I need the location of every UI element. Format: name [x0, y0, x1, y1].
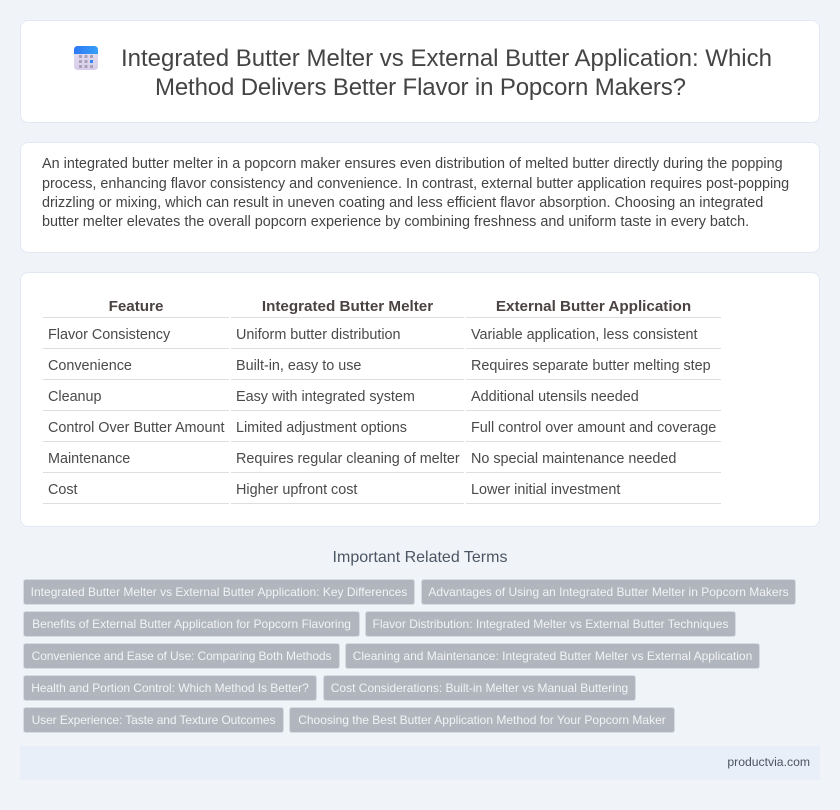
row: control over butter amount: Full control over amount and coverage [471, 420, 716, 436]
row: cost: Cost [48, 482, 78, 498]
tag [23, 675, 317, 701]
panel: introduction [20, 142, 820, 253]
tag [365, 611, 736, 637]
table header [109, 298, 691, 315]
row: cost: Lower initial investment [471, 482, 620, 498]
tag: Cleaning and Maintenance: Integrated Butter Melter vs External Application [353, 649, 752, 663]
row: maintenance [43, 451, 721, 473]
row: cleanup: Easy with integrated system [236, 389, 415, 405]
heading: important related terms: Important Related Terms [333, 549, 507, 566]
tag: Choosing the Best Butter Application Method for Your Popcorn Maker [298, 713, 666, 727]
tag: Benefits of External Butter Application for Popcorn Flavoring [32, 617, 351, 631]
text block: introduction paragraph: process, enhancing flavor consistency and convenience. In contrast, external butter application requires post-popping [42, 176, 789, 192]
text block: introduction paragraph [42, 156, 789, 230]
text block: introduction paragraph: An integrated butter melter in a popcorn maker ensures even distribution of melted butter directly during the popping [42, 156, 783, 172]
panel: title card [20, 20, 820, 123]
footer bar [20, 746, 820, 780]
tag [421, 579, 796, 605]
tag: Cost Considerations: Built-in Melter vs Manual Buttering [331, 681, 628, 695]
tag [23, 579, 415, 605]
row: convenience: Requires separate butter melting step [471, 358, 711, 374]
tag [289, 707, 675, 733]
row: cleanup [43, 389, 721, 411]
tag [23, 611, 360, 637]
table rows [43, 317, 721, 504]
tag: Health and Portion Control: Which Method Is Better? [31, 681, 309, 695]
row: cleanup: Additional utensils needed [471, 389, 639, 405]
tag [323, 675, 636, 701]
row: convenience: Convenience [48, 358, 132, 374]
table header: Feature [109, 298, 163, 315]
title: Integrated Butter Melter vs External Butter Application: Which [121, 45, 772, 72]
row: cost: Higher upfront cost [236, 482, 357, 498]
tag: Integrated Butter Melter vs External Butter Application: Key Differences [31, 585, 407, 599]
tag: User Experience: Taste and Texture Outcomes [32, 713, 275, 727]
panel: comparison table [20, 272, 820, 527]
row: cost [43, 482, 721, 504]
row: maintenance: Maintenance [48, 451, 130, 467]
title: Method Delivers Better Flavor in Popcorn Makers? [155, 74, 686, 101]
tag: Convenience and Ease of Use: Comparing Both Methods [32, 649, 331, 663]
tag [345, 643, 760, 669]
tag [23, 643, 340, 669]
title [121, 45, 772, 101]
text block: introduction paragraph: butter melter elevates the overall popcorn experience by combining freshness and uniform taste in every batch. [42, 214, 749, 230]
row: convenience [43, 358, 721, 380]
row: control over butter amount: Limited adjustment options [236, 420, 407, 436]
row: control over butter amount [43, 420, 721, 442]
table header: Integrated Butter Melter [262, 298, 433, 315]
row: convenience: Built-in, easy to use [236, 358, 361, 374]
footer: source: productvia.com [727, 755, 810, 769]
table header: External Butter Application [496, 298, 691, 315]
icon: calendar [74, 46, 98, 70]
row: maintenance: Requires regular cleaning of melter [236, 451, 460, 467]
tag: Advantages of Using an Integrated Butter Melter in Popcorn Makers [428, 585, 789, 599]
tag: Flavor Distribution: Integrated Melter vs External Butter Techniques [373, 617, 728, 631]
row: flavor consistency: Uniform butter distribution [236, 327, 400, 343]
row: cleanup: Cleanup [48, 389, 102, 405]
tag [23, 707, 284, 733]
row: control over butter amount: Control Over Butter Amount [48, 420, 225, 436]
related term tags [23, 579, 796, 733]
text block: introduction paragraph: drizzling or mixing, which can result in uneven coating and less efficient flavor absorption. Choosing an integrated [42, 195, 763, 211]
row: maintenance: No special maintenance needed [471, 451, 676, 467]
row: flavor consistency: Variable application, less consistent [471, 327, 698, 343]
row: flavor consistency: Flavor Consistency [48, 327, 170, 343]
row: flavor consistency [43, 327, 721, 349]
